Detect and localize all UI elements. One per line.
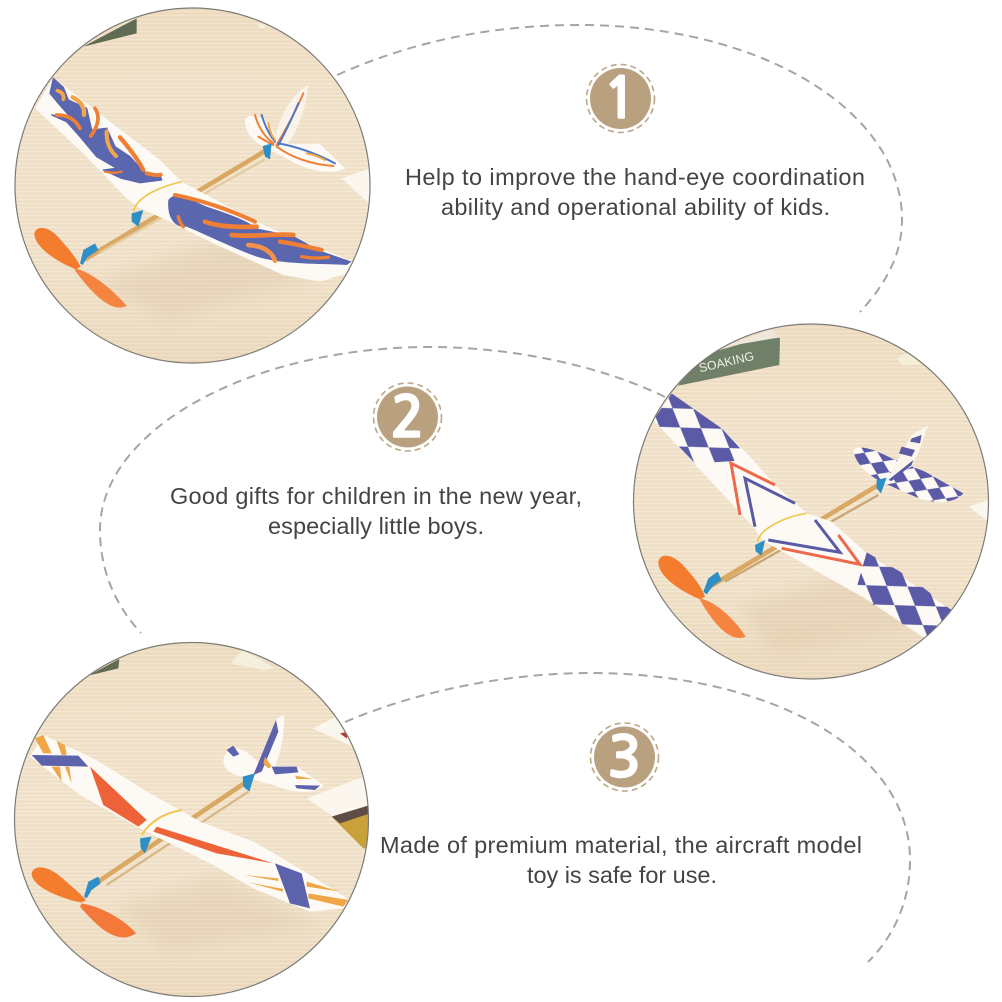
text block 2 [170, 483, 582, 539]
badge 3 [590, 723, 658, 791]
photo circle 3: stripe glider [10, 638, 375, 1002]
text block 1: Help to improve the hand-eye coordination [405, 164, 865, 190]
text block 3: toy is safe for use. [527, 862, 717, 888]
badge 2: 2 [391, 391, 424, 446]
dashed connector 1 [337, 25, 902, 312]
dashed connector 2 [100, 347, 665, 633]
box label: SOAKING [698, 349, 755, 375]
badge 2 [374, 383, 442, 451]
text block 3 [380, 832, 862, 888]
badge 3: 3 [608, 731, 641, 786]
text block 1 [405, 164, 865, 220]
badge 1: 1 [603, 72, 637, 127]
text block 1: ability and operational ability of kids. [441, 194, 830, 220]
text block 2: especially little boys. [268, 513, 484, 539]
photo circle 2: checker glider [630, 320, 992, 685]
photo circle 1: flame glider [10, 3, 375, 368]
dashed connector 3 [345, 673, 910, 962]
badge 1 [586, 64, 654, 132]
text block 2: Good gifts for children in the new year, [170, 483, 582, 509]
text block 3: Made of premium material, the aircraft model [380, 832, 862, 858]
